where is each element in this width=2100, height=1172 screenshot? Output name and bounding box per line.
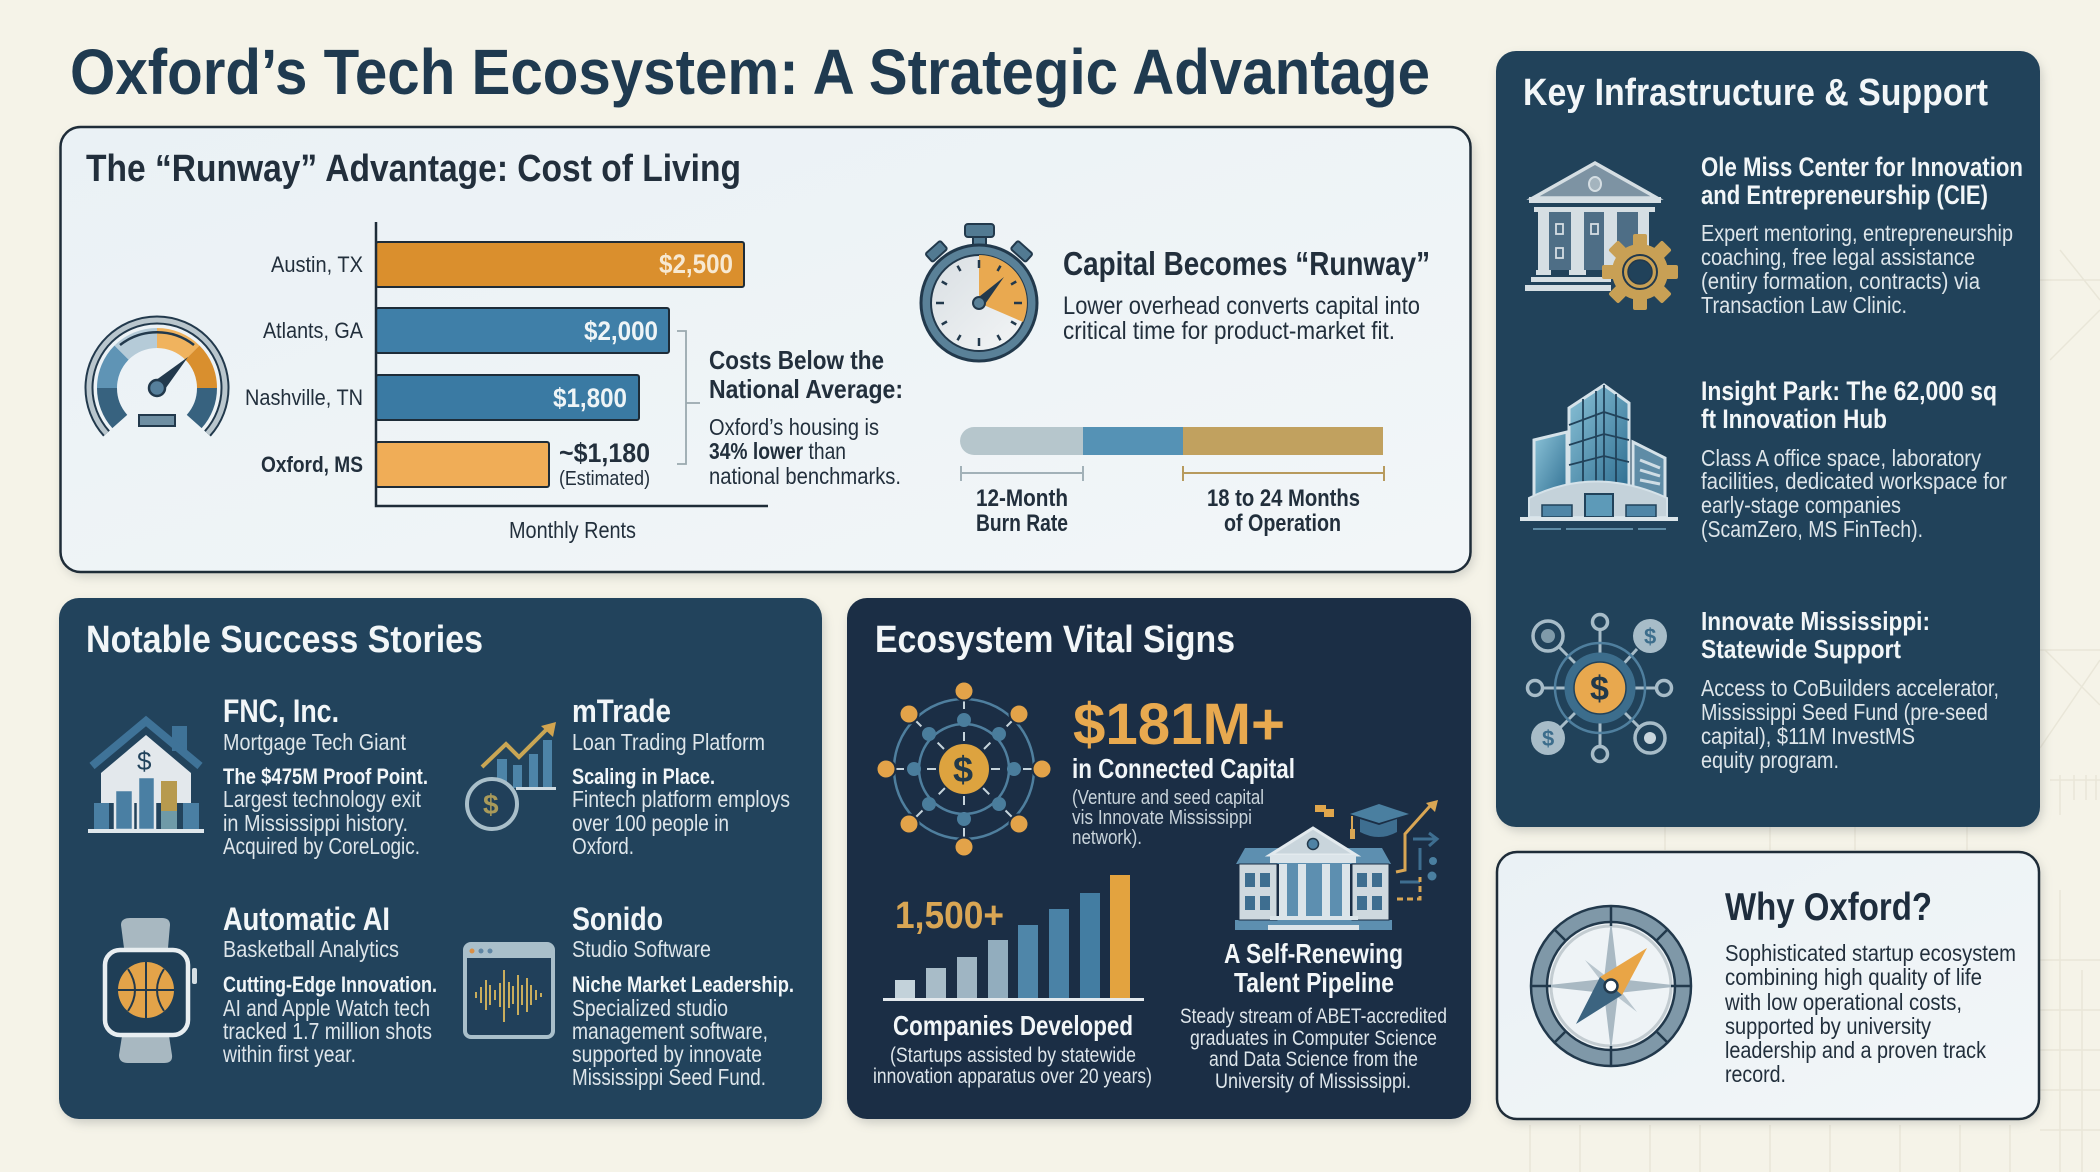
story: Sonido: Niche Market Leadership. (572, 972, 794, 997)
icon: chart with coin: $ (483, 789, 499, 820)
icon: statewide network: $ (1644, 624, 1656, 649)
item: Insight Park (1701, 376, 2007, 542)
chart: companies developed: innovation apparatus over 20 years) (873, 1065, 1152, 1088)
heading: success stories: Notable Success Stories (86, 619, 483, 661)
story: FNC: The $475M Proof Point. (223, 764, 428, 789)
panel: key infrastructure and support (1496, 51, 2042, 831)
story: FNC: FNC, Inc. (223, 693, 339, 729)
icon: audio waveform window (465, 944, 553, 1037)
bar: Atlanta (263, 308, 669, 353)
bar: Oxford: Oxford, MS (261, 452, 363, 477)
text: talent pipeline: Steady stream of ABET-accredited (1180, 1005, 1447, 1028)
icon: statewide network (1528, 614, 1672, 762)
item: Innovate Mississippi: Access to CoBuilders accelerator, (1701, 675, 1999, 701)
text: why oxford: supported by university (1725, 1013, 1931, 1039)
item: Insight Park: Class A office space, laboratory (1701, 445, 1981, 471)
item: Innovate Mississippi: Mississippi Seed Fund (pre-seed (1701, 699, 1988, 725)
item: Insight Park: ft Innovation Hub (1701, 404, 1887, 434)
item: Innovate Mississippi: Statewide Support (1701, 634, 1901, 664)
item: CIE: Ole Miss Center for Innovation (1701, 152, 2023, 182)
chart: companies developed (873, 875, 1152, 1088)
text: talent pipeline: A Self-Renewing (1224, 938, 1403, 969)
bar chart: monthly rents (245, 222, 768, 543)
item: CIE: Transaction Law Clinic. (1701, 292, 1907, 318)
story: Sonido: Specialized studio (572, 995, 728, 1021)
story: Sonido: supported by innovate (572, 1041, 762, 1067)
bar: Oxford: ~$1,180 (559, 438, 650, 468)
runway timeline bar: of Operation (1224, 510, 1341, 537)
callout: below national average: Oxford’s housing is (709, 414, 879, 440)
story: Automatic AI: Automatic AI (223, 901, 390, 937)
stat: connected capital: in Connected Capital (1072, 753, 1295, 784)
item: Insight Park: Insight Park: The 62,000 sq (1701, 376, 1997, 406)
story: FNC: in Mississippi history. (223, 810, 408, 836)
item: CIE: coaching, free legal assistance (1701, 244, 1975, 270)
story: mTrade (572, 693, 790, 859)
bar: Oxford (261, 438, 650, 490)
text: why oxford: leadership and a proven track (1725, 1037, 1986, 1063)
story: mTrade: over 100 people in (572, 810, 729, 836)
story: FNC: Largest technology exit (223, 786, 422, 812)
item: Insight Park: (ScamZero, MS FinTech). (1701, 516, 1923, 542)
title: Oxford’s Tech Ecosystem: A Strategic Advantage (70, 36, 1430, 108)
panel: notable success stories (59, 598, 824, 1123)
heading: vital signs: Ecosystem Vital Signs (875, 619, 1235, 661)
bar: Atlanta: Atlants, GA (263, 318, 363, 343)
icon: capital network (876, 682, 1052, 856)
chart: companies developed: (Startups assisted by statewide (890, 1044, 1136, 1067)
icon: stopwatch (921, 224, 1037, 361)
panel: runway advantage (60, 127, 1474, 577)
text: why oxford: Sophisticated startup ecosystem (1725, 940, 2016, 966)
text: capital becomes runway (1063, 245, 1430, 345)
runway timeline bar: Burn Rate (976, 510, 1068, 537)
bar: Oxford: (Estimated) (559, 468, 650, 490)
stat: connected capital: vis Innovate Mississippi (1072, 807, 1252, 829)
item: Innovate Mississippi (1701, 606, 1999, 773)
item: Innovate Mississippi: capital), $11M InvestMS (1701, 723, 1915, 749)
story: FNC: Acquired by CoreLogic. (223, 833, 420, 859)
item: Insight Park: early-stage companies (1701, 492, 1901, 518)
callout: below national average: national benchmarks. (709, 463, 901, 489)
text: talent pipeline: University of Mississippi. (1215, 1070, 1411, 1093)
heading: runway: The “Runway” Advantage: Cost of Living (86, 148, 741, 190)
bar: Atlanta: $2,000 (584, 316, 658, 346)
icon: university with graduation cap (1235, 800, 1438, 930)
icon: compass (1531, 906, 1691, 1066)
story: Sonido: Studio Software (572, 936, 711, 962)
story: Automatic AI: AI and Apple Watch tech (223, 995, 430, 1021)
item: CIE: (entiry formation, contracts) via (1701, 268, 1981, 294)
bar chart: monthly rents: Monthly Rents (509, 517, 636, 543)
story: Sonido (572, 901, 794, 1090)
callout: below national average (709, 345, 903, 489)
story: mTrade: Scaling in Place. (572, 764, 715, 789)
story: Sonido: Mississippi Seed Fund. (572, 1064, 766, 1090)
text: why oxford (1724, 886, 2016, 1087)
text: talent pipeline (1180, 938, 1447, 1093)
callout: below national average: Costs Below the (709, 345, 884, 375)
text: capital becomes runway: critical time for product-market fit. (1063, 317, 1395, 345)
icon: gauge (89, 320, 225, 434)
icon: capital network: $ (953, 749, 973, 790)
story: FNC (223, 693, 428, 859)
story: mTrade: Loan Trading Platform (572, 729, 765, 755)
stat: connected capital: $181M+ (1073, 692, 1285, 757)
bar: Nashville: Nashville, TN (245, 385, 363, 410)
bar: Austin (271, 242, 744, 287)
story: Automatic AI: Cutting-Edge Innovation. (223, 972, 437, 997)
chart: companies developed: Companies Developed (893, 1010, 1133, 1041)
text: why oxford: combining high quality of life (1725, 964, 1982, 990)
icon: bank with gear (1525, 163, 1678, 310)
story: Sonido: Sonido (572, 901, 663, 937)
stat: connected capital (1072, 692, 1295, 849)
story: Automatic AI: Basketball Analytics (223, 936, 399, 962)
story: Automatic AI: within first year. (222, 1041, 356, 1067)
text: capital becomes runway: Lower overhead converts capital into (1063, 292, 1420, 320)
text: talent pipeline: graduates in Computer Science (1190, 1027, 1437, 1050)
runway timeline bar (960, 427, 1384, 537)
runway timeline bar: 12-Month (976, 485, 1068, 512)
text: talent pipeline: and Data Science from the (1209, 1048, 1418, 1071)
chart: companies developed: 1,500+ (895, 895, 1004, 937)
runway timeline bar: 18 to 24 Months (1207, 485, 1360, 512)
story: Automatic AI: tracked 1.7 million shots (223, 1018, 432, 1044)
icon: statewide network: $ (1542, 726, 1554, 751)
item: Innovate Mississippi: Innovate Mississippi: (1701, 606, 1930, 636)
bar: Nashville (245, 375, 639, 420)
item: Innovate Mississippi: equity program. (1701, 747, 1839, 773)
panel: why oxford (1497, 852, 2042, 1123)
story: FNC: Mortgage Tech Giant (223, 729, 407, 755)
panel: ecosystem vital signs (847, 598, 1473, 1123)
text: talent pipeline: Talent Pipeline (1234, 967, 1394, 998)
stat: connected capital: network). (1072, 827, 1142, 849)
icon: house with bars: $ (137, 746, 152, 776)
callout: below national average: 34% lower than (709, 438, 846, 464)
icon: office buildings (1520, 385, 1678, 529)
story: Automatic AI (222, 901, 437, 1067)
text: why oxford: Why Oxford? (1725, 886, 1932, 929)
text: why oxford: record. (1725, 1061, 1786, 1087)
story: Sonido: management software, (572, 1018, 768, 1044)
item: CIE: and Entrepreneurship (CIE) (1701, 180, 1988, 210)
item: Insight Park: facilities, dedicated workspace for (1701, 468, 2007, 494)
icon: house with bars (88, 721, 204, 833)
stat: connected capital: (Venture and seed capital (1072, 787, 1264, 809)
icon: chart with coin (467, 722, 556, 829)
bar: Austin: Austin, TX (271, 252, 363, 277)
heading: infrastructure: Key Infrastructure & Support (1523, 72, 1988, 114)
icon: smartwatch basketball (105, 918, 197, 1063)
item: CIE (1701, 152, 2023, 318)
text: capital becomes runway: Capital Becomes “Runway” (1063, 245, 1430, 282)
text: why oxford: with low operational costs, (1724, 989, 1962, 1015)
story: mTrade: mTrade (572, 693, 671, 729)
bar: Nashville: $1,800 (553, 383, 627, 413)
story: mTrade: Oxford. (572, 833, 634, 859)
story: mTrade: Fintech platform employs (572, 786, 790, 812)
bar: Austin: $2,500 (659, 249, 733, 279)
item: CIE: Expert mentoring, entrepreneurship (1701, 220, 2013, 246)
callout: below national average: National Average: (709, 374, 903, 404)
icon: statewide network: $ (1590, 670, 1609, 708)
